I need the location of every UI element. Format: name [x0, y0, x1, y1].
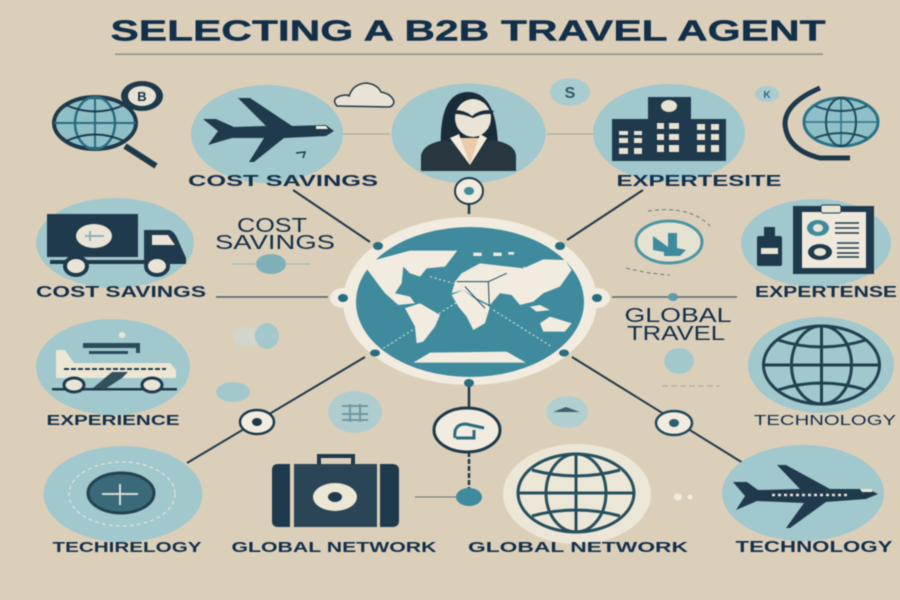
node: lower left	[240, 410, 274, 434]
icon: globe ellipse right	[748, 317, 894, 413]
label: expertense: EXPERTENSE	[755, 284, 897, 301]
icon: delivery truck ellipse	[36, 198, 194, 288]
icon: plane ellipse	[191, 85, 343, 183]
label: cost savings top: COST SAVINGS	[188, 173, 379, 190]
icon: compass ellipse	[44, 446, 202, 542]
text block: cost savings	[215, 215, 335, 254]
connector lines	[187, 134, 743, 497]
icon: faint dot right	[664, 348, 694, 374]
land: north america	[365, 251, 457, 305]
text block: global travel: TRAVEL	[627, 323, 725, 345]
icon: globe ellipse bottom	[503, 444, 651, 544]
node: lower right	[656, 411, 692, 435]
text block: cost savings: COST	[237, 215, 307, 237]
label: expertesite: EXPERTESITE	[616, 173, 782, 190]
icon: magnifier with globe	[54, 81, 163, 166]
land: south america	[405, 303, 440, 343]
land: australia	[540, 317, 572, 332]
icon: faint bubble left	[233, 323, 279, 349]
plane outline	[457, 273, 507, 308]
icon: small teal dot	[256, 254, 286, 274]
land: eurasia	[452, 259, 572, 305]
text block: cost savings: SAVINGS	[215, 232, 335, 254]
icon: suitcase	[272, 456, 399, 527]
text block: global travel: GLOBAL	[624, 305, 732, 327]
land: small islands	[473, 252, 550, 312]
title: SELECTING A B2B TRAVEL AGENT	[110, 16, 826, 48]
text block: global travel	[624, 305, 732, 345]
icon: badge bottom centre	[434, 408, 500, 452]
icon: building ellipse	[593, 84, 745, 182]
icon: small teal dot bottom	[456, 488, 482, 506]
icon: faint capsule left	[216, 382, 250, 402]
icon: globe with arc	[785, 88, 878, 158]
icon: small airport badge	[626, 210, 710, 275]
label: experience: EXPERIENCE	[46, 412, 180, 429]
label: technology right: TECHNOLOGY	[754, 412, 896, 429]
label: techirelogy: TECHIRELOGY	[52, 539, 202, 556]
icon: aeroplane on ground ellipse	[36, 319, 190, 415]
icon: S badge: S	[565, 85, 576, 102]
label: technology bottom: TECHNOLOGY	[736, 539, 893, 556]
icon: cloud	[335, 83, 394, 107]
land: africa	[452, 290, 490, 330]
icon: central world map	[343, 217, 597, 385]
icon: K badge: K	[763, 90, 771, 101]
icon: K badge	[755, 86, 779, 102]
label: global network right: GLOBAL NETWORK	[468, 539, 688, 556]
icon: clipboard ellipse	[741, 199, 891, 287]
icon: S badge	[550, 78, 590, 106]
icon: magnifier with globe: B	[137, 89, 147, 104]
icon: faint grid badge	[328, 391, 382, 433]
label: cost savings left: COST SAVINGS	[36, 284, 206, 301]
icon: small white dots	[674, 494, 692, 500]
icon: faint badge right	[546, 396, 588, 428]
icon: small dot on right connector	[668, 293, 678, 301]
connector nodes around map	[330, 242, 610, 387]
base panel	[413, 352, 526, 363]
label: global network left: GLOBAL NETWORK	[232, 539, 437, 556]
route lines	[383, 267, 552, 348]
icon: plane ellipse bottom right	[722, 445, 884, 541]
icon: businesswoman ellipse	[392, 84, 546, 184]
node: top	[455, 178, 483, 204]
